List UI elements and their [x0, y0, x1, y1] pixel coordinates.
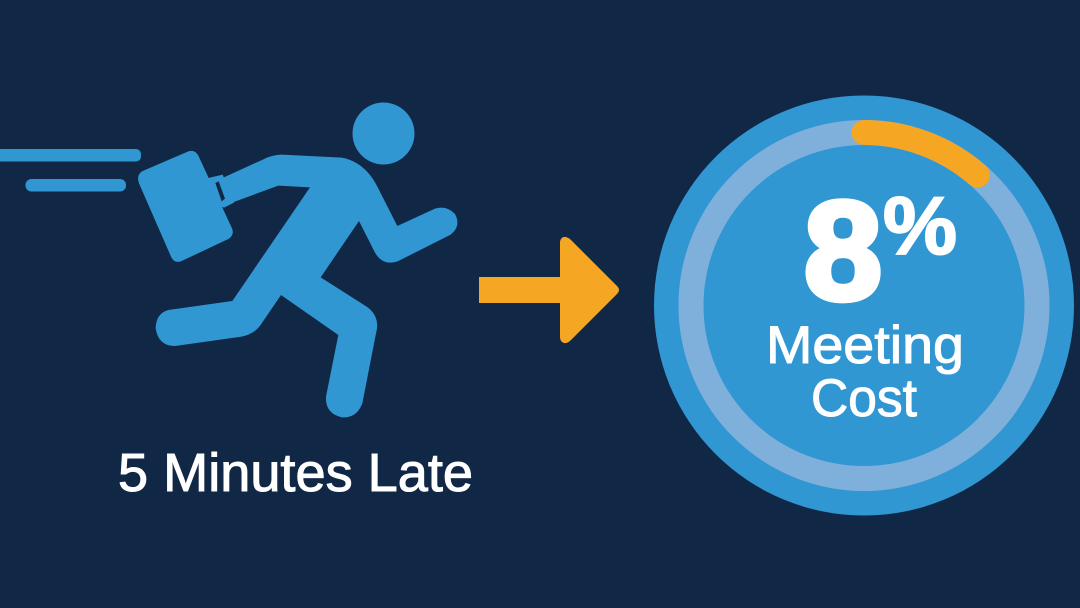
icon: running businessman with briefcase: [0, 102, 457, 417]
briefcase handle: [207, 175, 234, 208]
percent sign: %: [883, 181, 957, 272]
gauge progress arc: [864, 132, 978, 175]
stat number: 8: 8: [804, 172, 882, 329]
label: 5 Minutes Late: 5 Minutes Late: [118, 443, 473, 503]
speed lines: [0, 149, 141, 192]
panel: meeting cost gauge: [654, 96, 1074, 516]
gauge track: [691, 132, 1037, 478]
arrow: [479, 237, 619, 343]
runner body: [156, 155, 457, 417]
gauge disc: [654, 96, 1074, 516]
runner head: [352, 102, 414, 164]
caption: Meeting: Meeting: [766, 316, 964, 375]
briefcase: [138, 151, 233, 262]
caption: Cost: Cost: [811, 369, 917, 428]
